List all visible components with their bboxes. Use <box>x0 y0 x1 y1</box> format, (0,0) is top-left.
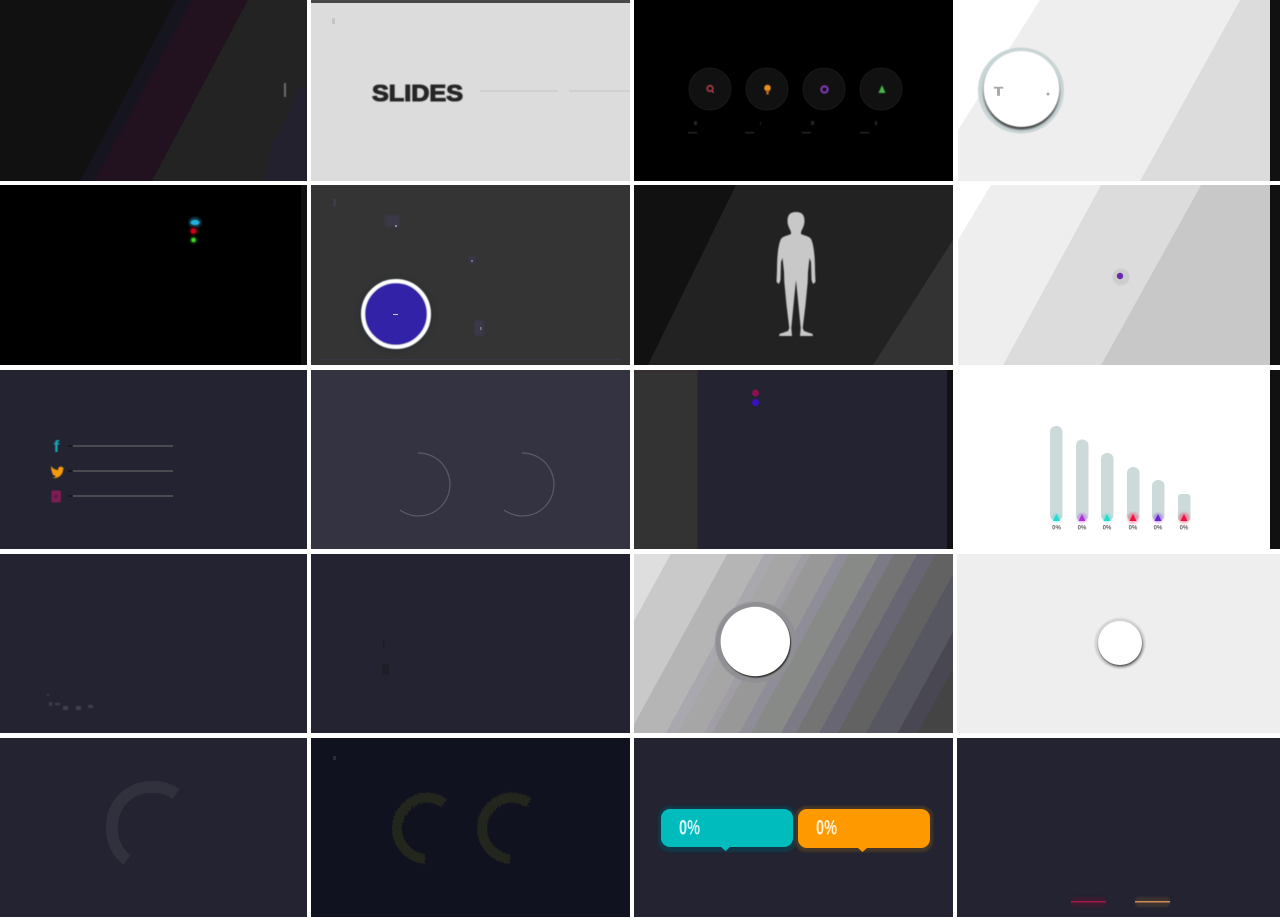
arc <box>112 787 176 860</box>
bar 6 <box>1178 494 1190 532</box>
magenta dot <box>752 390 759 396</box>
panel: grey gradient stripes with white circle <box>634 554 953 733</box>
panel: three coloured dots <box>0 185 307 365</box>
bar 3: 0% <box>1103 526 1112 532</box>
green dot <box>190 236 198 244</box>
panel: descending bar chart <box>1050 370 1280 549</box>
panel: slides title <box>311 0 630 181</box>
red dot <box>189 226 198 236</box>
bar 3 <box>1101 453 1114 532</box>
panel: two thin arcs <box>311 370 630 549</box>
panel: small white circle <box>957 554 1280 733</box>
panel: two textured arcs <box>311 738 630 917</box>
arc right <box>482 798 529 859</box>
bar 4 <box>1127 467 1140 532</box>
callout: teal: 0% <box>679 816 700 840</box>
icon circle: search <box>689 68 731 110</box>
purple dot <box>1112 268 1130 286</box>
bar 4: 0% <box>1129 526 1138 532</box>
panel: white circle on light diagonal <box>958 0 1280 181</box>
heading: SLIDES: SLIDES <box>372 80 463 106</box>
orange line <box>1135 897 1170 907</box>
bar 2 <box>1076 440 1088 532</box>
bar 5 <box>1152 480 1164 532</box>
badge circle <box>978 48 1064 134</box>
human figure <box>776 212 816 336</box>
panel: social icon lines <box>0 370 307 549</box>
callout: teal <box>658 806 796 852</box>
panel: blue circle on charcoal <box>311 185 630 365</box>
panel: split dark with two dots <box>634 370 953 549</box>
icon: twitter <box>51 466 64 478</box>
icon: instagram <box>52 490 61 502</box>
icon circle: ring <box>803 68 845 110</box>
panel: percentage callouts <box>634 738 953 917</box>
callout: orange <box>795 806 933 852</box>
bar 2: 0% <box>1078 526 1087 532</box>
panel: light diagonal with purple dot <box>958 185 1280 365</box>
panel: human silhouette <box>634 185 953 365</box>
panel: navy with faint marks <box>0 554 307 733</box>
labels under circles <box>688 121 877 134</box>
blue circle <box>359 278 433 352</box>
arc right <box>504 453 554 516</box>
panel: navy with dark marks <box>311 554 630 733</box>
blue dot <box>752 399 759 406</box>
icon circle: arrow <box>860 68 902 110</box>
red line <box>1071 897 1106 907</box>
white circle <box>715 602 796 683</box>
cyan dot <box>188 217 202 228</box>
callout: orange: 0% <box>816 816 837 840</box>
bar 6: 0% <box>1180 526 1189 532</box>
bar 1: 0% <box>1052 526 1062 532</box>
panel: thick arc <box>0 738 307 917</box>
icon: facebook: f <box>54 437 60 456</box>
panel: two short glowing lines <box>957 738 1280 917</box>
panel: four icon circles <box>634 0 953 181</box>
bar 5: 0% <box>1154 526 1163 532</box>
white circle <box>1094 618 1146 669</box>
panel: dark diagonal stripes <box>0 0 307 181</box>
badge circle: T <box>994 86 1003 98</box>
bar 1 <box>1050 426 1062 532</box>
arc left <box>397 798 444 859</box>
arc left <box>400 453 450 516</box>
icon circle: bulb <box>746 68 788 110</box>
